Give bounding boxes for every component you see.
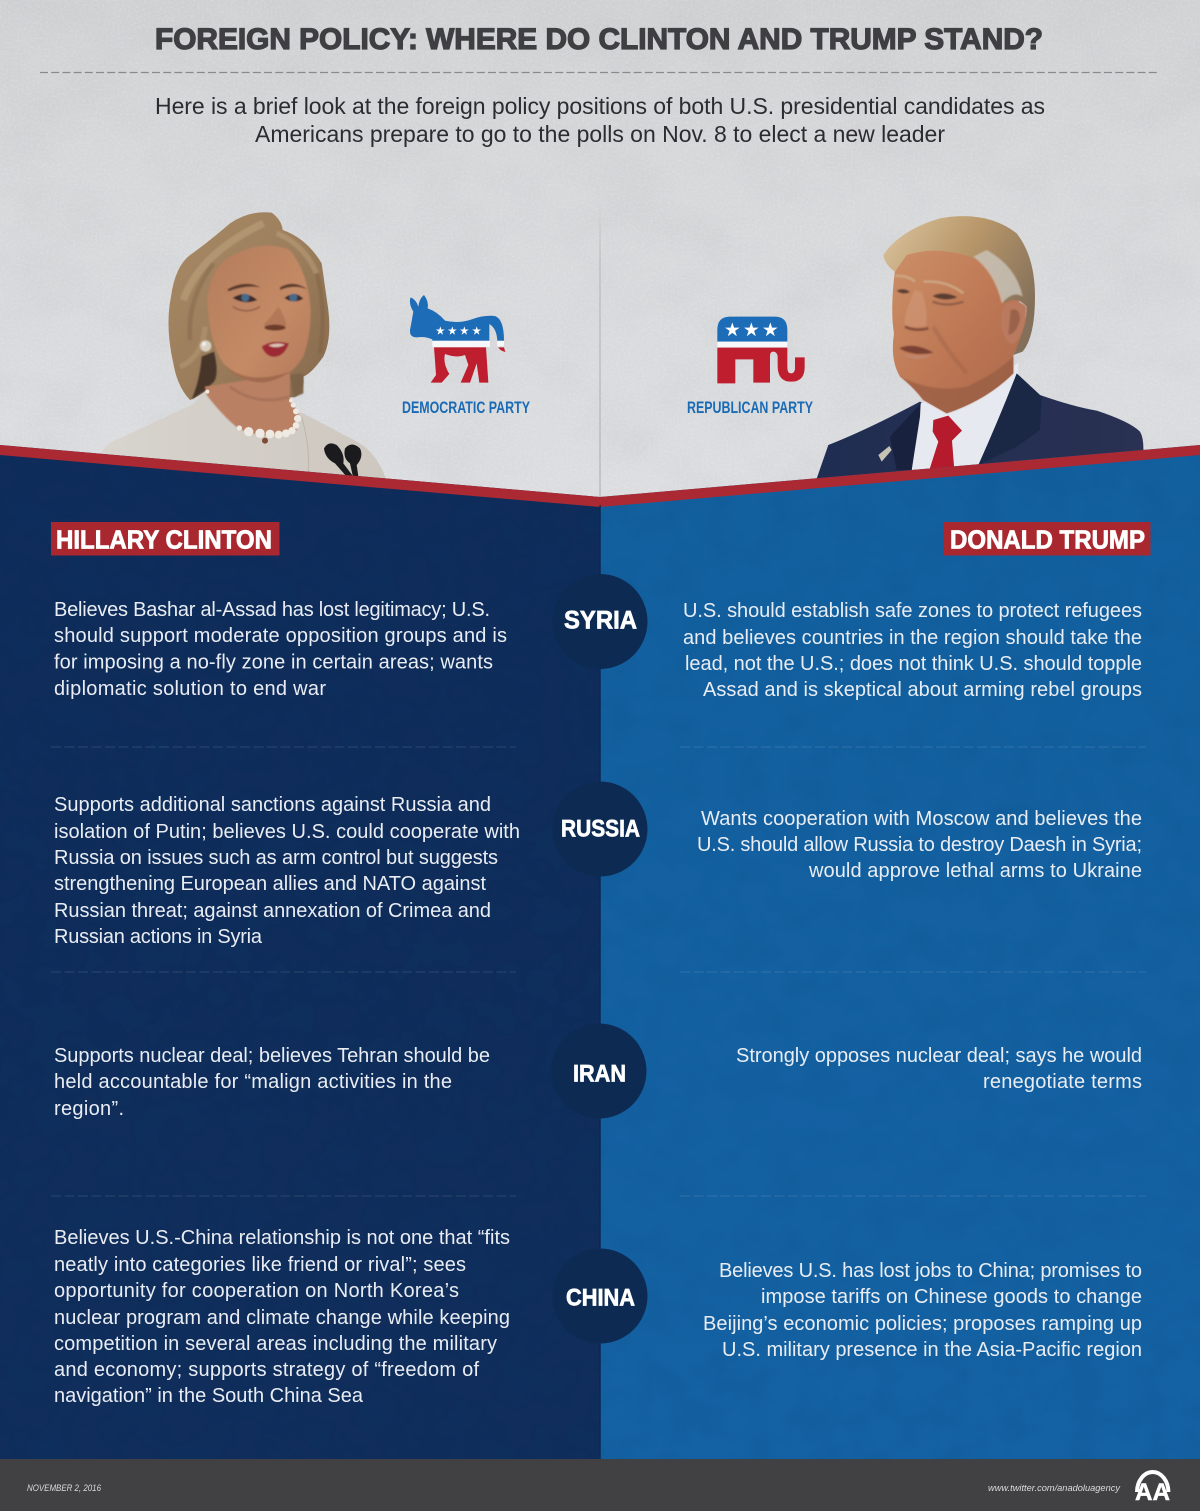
text: Clinton on China: neatly into categories like friend or rival”; sees [54, 1254, 466, 1276]
text: Trump on China [703, 1260, 1142, 1361]
text: Clinton on China: opportunity for cooperation on North Korea’s [54, 1280, 459, 1302]
panel: Trump column [600, 445, 1200, 1459]
text: Clinton on Russia: strengthening European allies and NATO against [54, 873, 486, 895]
text: Trump on Syria: and believes countries in the region should take the [683, 627, 1142, 649]
topic badge: Iran: IRAN [573, 1060, 626, 1088]
text: Clinton on Russia [54, 794, 520, 948]
text: Trump on China: U.S. military presence in the Asia-Pacific region [722, 1339, 1142, 1361]
text: Trump on China: impose tariffs on Chinese goods to change [761, 1286, 1142, 1308]
topic badge: Iran [552, 1024, 646, 1118]
red chevron band [0, 445, 1200, 507]
title: FOREIGN POLICY: WHERE DO CLINTON AND TRUMP STAND? [155, 23, 1043, 56]
portrait: Hillary Clinton [100, 212, 387, 483]
topic badge: Russia: RUSSIA [561, 816, 640, 842]
text: Clinton on Syria: should support moderate opposition groups and is [54, 625, 507, 647]
footer bar [0, 1459, 1200, 1511]
text: Trump on Syria: Assad and is skeptical about arming rebel groups [703, 679, 1142, 701]
text: Clinton on Syria: for imposing a no-fly zone in certain areas; wants [54, 652, 493, 674]
icon: Anadolu Agency logo: AA [1135, 1479, 1170, 1506]
text: Clinton on China: competition in several areas including the military [54, 1333, 497, 1355]
heading: Donald Trump: DONALD TRUMP [950, 524, 1145, 554]
text: Trump on Russia: Wants cooperation with Moscow and believes the [701, 808, 1142, 830]
topic badge: China [552, 1248, 648, 1344]
icon: Democratic donkey [410, 295, 505, 383]
text: Clinton on Iran [54, 1045, 490, 1120]
topic badge: Syria [552, 574, 648, 669]
portrait: Donald Trump [815, 216, 1143, 483]
text: Trump on China: Believes U.S. has lost jobs to China; promises to [719, 1260, 1142, 1282]
text: Trump on Russia: U.S. should allow Russia to destroy Daesh in Syria; [697, 834, 1142, 856]
label: Republican Party: REPUBLICAN PARTY [687, 398, 813, 417]
text: Clinton on Iran: region”. [54, 1098, 124, 1120]
text: Clinton on Russia: isolation of Putin; believes U.S. could cooperate with [54, 821, 520, 843]
intro text: Here is a brief look at the foreign policy positions of both U.S. presidential candidates as [155, 93, 1045, 119]
text: Trump on Syria [683, 600, 1142, 701]
icon: Republican elephant [717, 317, 805, 383]
text: Clinton on Russia: Russian threat; against annexation of Crimea and [54, 900, 491, 922]
text: Trump on Iran [736, 1045, 1142, 1093]
footer bar: www.twitter.com/anadoluagency [988, 1483, 1121, 1494]
label: Democratic Party: DEMOCRATIC PARTY [402, 398, 530, 417]
footer bar: NOVEMBER 2, 2016 [27, 1483, 101, 1493]
text: Clinton on China: nuclear program and climate change while keeping [54, 1307, 510, 1329]
text: Clinton on Russia: Russia on issues such as arm control but suggests [54, 847, 498, 869]
intro text: Americans prepare to go to the polls on Nov. 8 to elect a new leader [255, 121, 945, 147]
text: Clinton on China: and economy; supports strategy of “freedom of [54, 1359, 479, 1381]
text: Clinton on Russia: Russian actions in Syria [54, 926, 263, 948]
text: Clinton on Iran: Supports nuclear deal; believes Tehran should be [54, 1045, 490, 1067]
topic badge: China: CHINA [566, 1284, 635, 1312]
text: Clinton on China: navigation” in the South China Sea [54, 1385, 364, 1407]
intro text [155, 93, 1045, 147]
text: Trump on Syria: U.S. should establish safe zones to protect refugees [683, 600, 1142, 622]
text: Clinton on Syria: diplomatic solution to end war [54, 678, 326, 700]
heading: Hillary Clinton: HILLARY CLINTON [56, 524, 272, 554]
text: Clinton on Russia: Supports additional sanctions against Russia and [54, 794, 491, 816]
topic badge: Syria: SYRIA [564, 606, 637, 634]
text: Trump on Iran: Strongly opposes nuclear deal; says he would [736, 1045, 1142, 1067]
text: Clinton on Iran: held accountable for “malign activities in the [54, 1071, 452, 1093]
topic badge: Russia [552, 782, 648, 876]
text: Clinton on Syria: Believes Bashar al-Assad has lost legitimacy; U.S. [54, 599, 490, 621]
panel: Clinton column [0, 445, 600, 1459]
text: Clinton on Syria [54, 599, 507, 700]
text: Trump on Iran: renegotiate terms [983, 1071, 1142, 1093]
text: Trump on Syria: lead, not the U.S.; does not think U.S. should topple [685, 653, 1142, 675]
text: Trump on Russia [697, 808, 1142, 882]
text: Trump on Russia: would approve lethal arms to Ukraine [808, 860, 1142, 882]
text: Trump on China: Beijing’s economic policies; proposes ramping up [703, 1313, 1142, 1335]
text: Clinton on China [54, 1227, 510, 1407]
dividers [51, 747, 1146, 1196]
background: grey concrete texture [0, 0, 1200, 520]
text: Clinton on China: Believes U.S.-China relationship is not one that “fits [54, 1227, 510, 1249]
